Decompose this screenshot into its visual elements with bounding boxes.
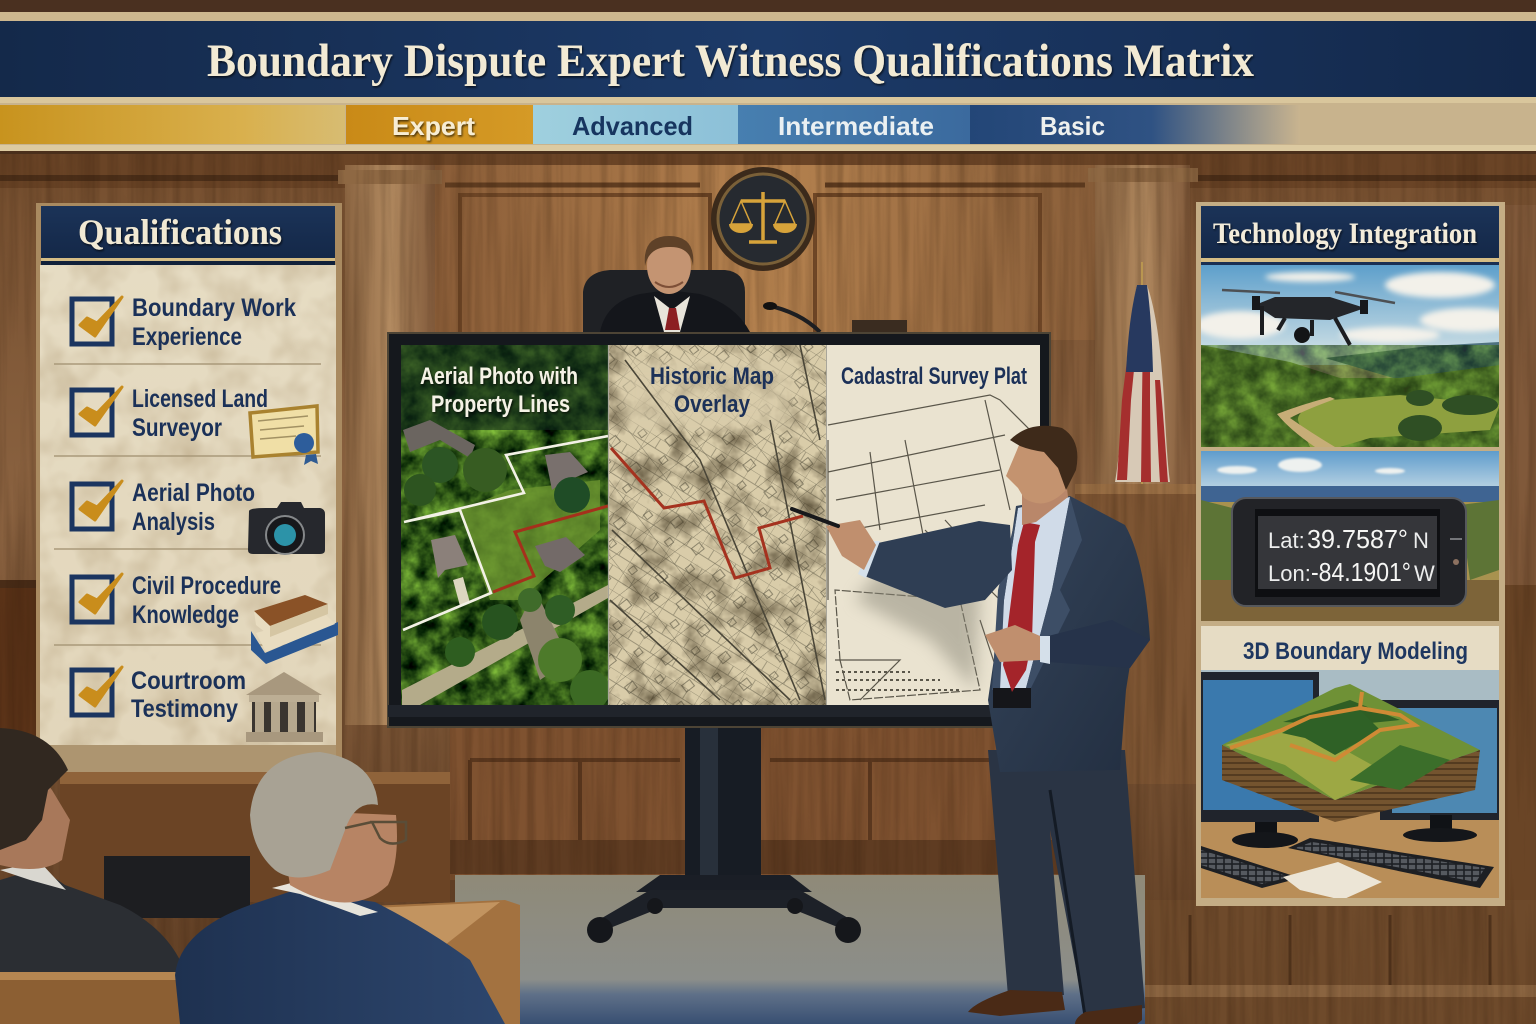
icon: stacked books [251, 595, 338, 664]
terrain model [1222, 684, 1480, 822]
item: licensed land surveyor: Surveyor [132, 414, 222, 442]
panel: aerial photo with property lines [401, 345, 610, 710]
legend: basic [970, 105, 1300, 144]
legend: advanced: Advanced [572, 111, 693, 141]
3D boundary modeling heading: 3D Boundary Modeling [1243, 638, 1468, 665]
presenter's hands and pointer [826, 520, 876, 570]
item: courtroom testimony: Testimony [131, 695, 238, 723]
screen column titles: Overlay [674, 391, 751, 418]
courtroom seal with scales of justice [711, 167, 815, 271]
presenter's trousers [988, 750, 1145, 1016]
icon: GPS handheld: Lon: [1268, 561, 1311, 586]
item: licensed land surveyor [72, 385, 318, 465]
item: civil procedure knowledge: Civil Procedure [132, 572, 281, 600]
judge's chair [583, 270, 745, 332]
image: GPS device [1201, 451, 1499, 621]
icon: camera [248, 502, 325, 554]
presenter's lapels [992, 497, 1082, 690]
item: civil procedure knowledge [72, 572, 338, 664]
legend bar: skill levels [0, 103, 1536, 154]
item: courtroom testimony: Courtroom [131, 667, 246, 695]
screen column titles [420, 363, 1027, 418]
audience member: right [175, 752, 505, 1024]
icon: GPS handheld: Lat: [1268, 528, 1305, 553]
panel: technology integration [1195, 202, 1520, 906]
icon: GPS handheld [1232, 498, 1466, 606]
technology integration heading: Technology Integration [1213, 217, 1477, 250]
judge's robe [600, 290, 750, 332]
icon: drone [1222, 290, 1395, 345]
item: civil procedure knowledge: Knowledge [132, 601, 239, 629]
American flag [1115, 262, 1170, 484]
image: drone over landscape [1195, 265, 1520, 447]
technology integration heading [1201, 206, 1499, 265]
item: boundary work experience: Boundary Work [132, 294, 296, 322]
qualifications heading [41, 206, 335, 265]
item: boundary work experience [72, 294, 296, 351]
legend: basic: Basic [1040, 111, 1105, 141]
item: licensed land surveyor: Licensed Land [132, 385, 268, 413]
judge [583, 236, 750, 332]
audience benches [0, 772, 520, 1024]
legend: advanced [533, 105, 738, 144]
screen column titles: Cadastral Survey Plat [841, 363, 1027, 390]
property boundary lines [403, 436, 608, 630]
presenter's belt [993, 688, 1031, 708]
icon: certificate [250, 406, 318, 465]
icon: GPS handheld: W [1414, 561, 1435, 586]
monitors [1201, 672, 1500, 848]
image: 3D terrain model on desk [1201, 670, 1500, 900]
presenter's neck and head [1022, 480, 1068, 525]
icon: GPS handheld: 39.7587° [1307, 524, 1408, 554]
display screen [388, 333, 1050, 727]
glasses [345, 822, 406, 844]
panel: cadastral survey plat [827, 345, 1040, 705]
judge's head [647, 238, 691, 294]
icon: GPS handheld: -84.1901° [1311, 557, 1411, 587]
screen column titles: Aerial Photo with [420, 363, 578, 390]
icon: courthouse [246, 672, 323, 742]
item: aerial photo analysis: Analysis [132, 508, 215, 536]
panel: historic map overlay [609, 345, 826, 705]
presenter's tie [1003, 522, 1040, 692]
legend: intermediate [738, 105, 970, 144]
legend: expert: Expert [392, 111, 475, 141]
screen column titles: Historic Map [650, 363, 774, 390]
presenter's shoes [968, 990, 1142, 1024]
item: aerial photo analysis [72, 479, 325, 554]
screen dividers [608, 345, 826, 705]
judge's microphone and bench items [763, 302, 907, 333]
keyboards and paper [1201, 838, 1494, 900]
legend: expert [346, 105, 533, 144]
title: Boundary Dispute Expert Witness Qualifications Matrix [207, 35, 1254, 87]
presenter's shirt [996, 497, 1070, 688]
icon: GPS handheld: N [1413, 528, 1429, 553]
legend: intermediate: Intermediate [778, 111, 934, 141]
item: courtroom testimony [72, 667, 323, 742]
header band [0, 0, 1536, 103]
panel: qualifications [36, 203, 342, 775]
historic boundary line [611, 448, 803, 578]
presenter expert witness [792, 426, 1150, 1024]
3D boundary modeling heading [1201, 626, 1499, 670]
item: aerial photo analysis: Aerial Photo [132, 479, 255, 507]
presenter's extended arm [862, 521, 1012, 608]
item: boundary work experience: Experience [132, 323, 242, 351]
floor stand for display [587, 725, 861, 943]
audience member: left [0, 728, 185, 972]
presenter's jacket [988, 496, 1150, 772]
qualifications heading: Qualifications [78, 212, 282, 252]
screen column titles: Property Lines [431, 391, 570, 418]
